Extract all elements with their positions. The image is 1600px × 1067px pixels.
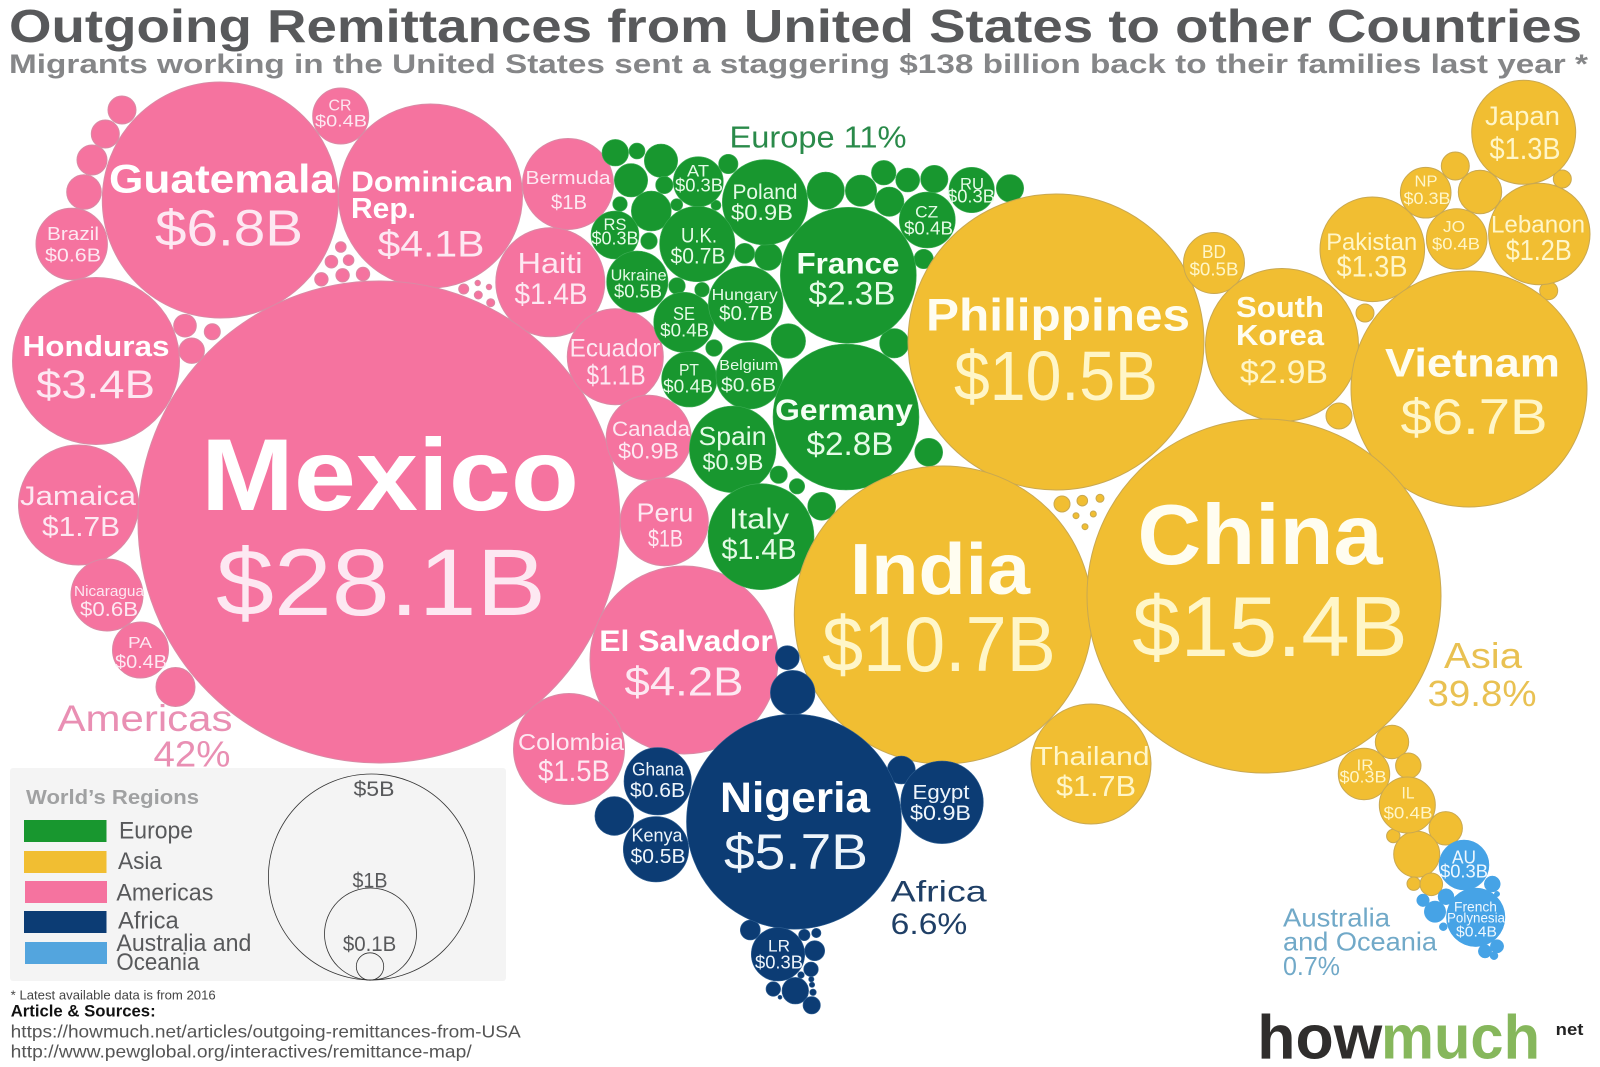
bubble: Kenya (623, 817, 689, 882)
source links: https://howmuch.net/articles/outgoing-remittances-from-USA (11, 1021, 521, 1041)
bubble: El Salvador: $4.2B (624, 658, 744, 704)
bubble: Ukraine (607, 251, 668, 312)
legend: Americas (25, 880, 213, 907)
region label: Australia and Oceania 0.7%: and Oceania (1283, 927, 1438, 957)
bubble: India: India (850, 530, 1031, 610)
bubble: Ukraine: Ukraine (611, 268, 667, 285)
bubble: Australia: AU (1452, 847, 1476, 867)
bubble: Australia: $0.3B (1440, 860, 1488, 881)
bubble: Ecuador: $1.1B (586, 359, 646, 390)
bubble: Russia (947, 167, 995, 213)
bubble: Portugal: PT (679, 361, 699, 380)
bubble: France: France (796, 247, 900, 280)
bubble: Serbia (591, 211, 639, 259)
panel: Europe bubbles (591, 120, 1024, 590)
bubble: U.K.: $0.7B (670, 243, 726, 268)
region label: Africa 6.6%: Africa (891, 876, 987, 909)
legend: Americas: Americas (116, 880, 213, 907)
bubble: French Polynesia: French (1454, 899, 1497, 915)
bubble: Hungary: Hungary (712, 287, 778, 304)
subtitle: Migrants working in the United States sent a staggering $138 billion back to their families last year * (9, 49, 1589, 79)
region label: Australia and Oceania 0.7%: Australia (1283, 903, 1391, 933)
bubble: Belgium (716, 342, 783, 409)
bubble: Ecuador (567, 309, 663, 405)
bubble: Mexico (138, 281, 620, 763)
bubble: Panama (112, 622, 168, 678)
bubble: El Salvador (590, 566, 778, 754)
bubble: Guatemala: $6.8B (155, 200, 303, 257)
panel: Africa bubbles (595, 646, 987, 1014)
bubble: Nepal: $0.3B (1404, 189, 1450, 208)
bubble: Egypt: $0.9B (910, 802, 971, 825)
bubble: Ukraine: $0.5B (614, 282, 662, 302)
bubble: Italy: Italy (729, 503, 790, 535)
sources heading: Article & Sources: (11, 1002, 156, 1021)
bubble: Italy: $1.4B (722, 534, 796, 566)
bubble: Jordan: JO (1443, 219, 1465, 236)
bubble: Nigeria (686, 714, 902, 929)
bubble: Nigeria: $5.7B (724, 824, 868, 880)
bubble: Portugal: $0.4B (663, 376, 713, 396)
bubble: Jordan: $0.4B (1432, 234, 1480, 253)
bubble: Guatemala: Guatemala (109, 158, 336, 202)
bubble: Spain: Spain (698, 421, 766, 451)
bubble: Ghana (624, 748, 691, 815)
bubble: Kenya: $0.5B (630, 846, 686, 868)
bubble: Iran: IR (1356, 758, 1374, 775)
bubble: French Polynesia: $0.4B (1456, 924, 1497, 941)
legend: Asia (24, 848, 163, 875)
region label: Americas 42% (58, 698, 232, 775)
source links: http://www.pewglobal.org/interactives/remittance-map/ (11, 1041, 472, 1061)
bubble: Jamaica (18, 445, 138, 565)
bubble: Canada: Canada (612, 418, 690, 441)
bubble: Philippines (908, 194, 1204, 490)
bubble: French Polynesia: Polynesia (1447, 910, 1505, 926)
bubble: Thailand: $1.7B (1056, 771, 1136, 803)
bubble: Russia: $0.3B (947, 187, 995, 207)
bubble: French Polynesia (1446, 888, 1505, 947)
legend: Europe: Europe (119, 818, 193, 845)
bubble: Poland (722, 160, 808, 245)
bubble: France: $2.3B (808, 275, 896, 311)
bubble: Liberia: LR (768, 937, 790, 956)
title: Outgoing Remittances from United States to other Countries (9, 0, 1582, 52)
bubble: Australia (1439, 840, 1489, 890)
bubble: Czech Republic: $0.4B (904, 219, 953, 239)
bubble: Nepal (1400, 167, 1451, 218)
bubble: Bangladesh: $0.5B (1190, 260, 1238, 280)
bubble: Thailand: Thailand (1034, 741, 1150, 771)
footnote: * Latest available data is from 2016 (11, 988, 216, 1002)
bubble: Colombia: Colombia (518, 729, 624, 755)
region label: Asia 39.8%: 39.8% (1428, 673, 1536, 714)
bubble: Pakistan: $1.3B (1336, 251, 1408, 284)
bubble: Panama: $0.4B (115, 652, 167, 672)
panel: Australia and Oceania bubbles (1283, 840, 1505, 981)
region label: Africa 6.6%: 6.6% (891, 908, 967, 941)
region label: Americas 42%: Americas (58, 698, 232, 739)
bubble: Canada: $0.9B (618, 438, 679, 463)
logo: howmuch.net: net (1556, 1020, 1584, 1039)
legend: Asia: Asia (118, 848, 163, 875)
bubble: Japan: Japan (1485, 101, 1560, 131)
bubble: Colombia (514, 694, 624, 804)
bubble: Lebanon: $1.2B (1506, 235, 1572, 267)
bubble: Haiti (496, 228, 605, 337)
bubble: Vietnam (1351, 271, 1587, 507)
bubble: Panama: PA (128, 635, 152, 652)
bubble: Jamaica: $1.7B (42, 511, 120, 542)
bubble: Canada (606, 395, 691, 480)
panel: Asia bubbles (794, 80, 1590, 896)
bubble: Peru: $1B (648, 526, 683, 553)
logo: howmuch.net (1257, 1003, 1584, 1067)
bubble: Japan (1472, 80, 1576, 184)
bubble: Germany: $2.8B (806, 426, 894, 462)
bubble: U.K. (660, 206, 735, 282)
bubble: Lebanon: Lebanon (1491, 212, 1585, 239)
region label: Americas 42%: 42% (154, 734, 230, 775)
bubble: South Korea (1206, 268, 1358, 422)
bubble: Dominican Republic: $4.1B (378, 224, 484, 265)
bubble: Peru (620, 478, 708, 566)
bubble: Bangladesh: BD (1202, 242, 1226, 262)
bubble: Jordan (1426, 209, 1487, 269)
bubble: China (1087, 419, 1441, 773)
bubble: Nicaragua (71, 559, 145, 631)
bubble: India (794, 466, 1092, 764)
legend heading: World’s Regions (26, 787, 199, 809)
bubble: Haiti: Haiti (518, 248, 582, 280)
legend: Australia and Oceania (25, 930, 251, 976)
bubble: U.K.: U.K. (681, 224, 717, 247)
bubble: Bermuda (522, 138, 614, 230)
bubble: Dominican Republic: Dominican (351, 167, 513, 199)
size scale circles: $5B (354, 778, 394, 801)
bubble: Liberia (751, 928, 805, 981)
bubble: Nepal: NP (1414, 174, 1438, 191)
legend: Africa (24, 908, 179, 935)
bubble: Costa Rica: CR (328, 98, 352, 115)
bubble: Haiti: $1.4B (514, 278, 588, 311)
bubble: Iran: $0.3B (1340, 767, 1386, 786)
size scale circles: $0.1B (343, 933, 396, 956)
bubble: Sweden: SE (673, 304, 695, 324)
bubble: Austria: AT (687, 162, 709, 181)
bubble: Sweden: $0.4B (660, 321, 709, 341)
bubble: Czech Republic: CZ (915, 202, 938, 221)
bubble: Israel (1379, 777, 1435, 833)
region label: Asia 39.8%: Asia (1444, 635, 1523, 676)
bubble: South Korea: South (1236, 292, 1324, 324)
bubble: South Korea: $2.9B (1240, 354, 1328, 390)
bubble: France (780, 207, 916, 343)
bubble: Colombia: $1.5B (538, 755, 610, 788)
size scale circles: $1B (352, 869, 388, 892)
bubble: Egypt: Egypt (912, 782, 970, 804)
bubble: Iran (1338, 748, 1390, 800)
bubble: Pakistan: Pakistan (1326, 229, 1417, 256)
bubble: Serbia: $0.3B (592, 228, 638, 248)
small unlabeled Europe bubbles (602, 139, 1024, 520)
legend: Australia and Oceania: Oceania (116, 949, 200, 976)
bubble: Lebanon (1489, 183, 1590, 285)
bubble: South Korea: Korea (1236, 320, 1325, 352)
legend: Australia and Oceania: Australia and (116, 930, 251, 957)
bubble: Brazil: Brazil (47, 224, 99, 244)
bubble: Italy (708, 484, 814, 590)
bubble: China: $15.4B (1132, 580, 1408, 675)
small unlabeled Oceania bubbles (1417, 876, 1504, 960)
bubble: Ghana: Ghana (632, 760, 685, 780)
region label: Asia 39.8% (1428, 635, 1536, 714)
bubble: Belgium: Belgium (719, 358, 778, 374)
bubble: El Salvador: El Salvador (599, 625, 773, 658)
bubble: Honduras: $3.4B (36, 363, 155, 407)
bubble: Honduras: Honduras (22, 331, 170, 363)
bubble: Japan: $1.3B (1490, 131, 1560, 166)
bubble: Thailand (1031, 704, 1151, 824)
bubble: Germany (773, 344, 919, 490)
bubble: Poland: Poland (732, 181, 798, 204)
bubble: Vietnam: $6.7B (1400, 389, 1548, 445)
bubble: Hungary: $0.7B (719, 303, 773, 325)
bubble: Liberia: $0.3B (755, 952, 803, 972)
bubble: Spain (689, 406, 776, 493)
region label: Australia and Oceania 0.7%: 0.7% (1283, 951, 1340, 981)
bubble: Belgium: $0.6B (721, 375, 776, 397)
bubble: Spain: $0.9B (702, 449, 764, 475)
panel: legend (10, 768, 506, 981)
bubble: Philippines: Philippines (926, 290, 1190, 341)
bubble: Bermuda: Bermuda (526, 168, 612, 188)
source links (11, 1021, 521, 1061)
bubble: Honduras (12, 278, 180, 444)
bubble: Brazil: $0.6B (45, 245, 101, 266)
bubble: Israel: $0.4B (1384, 803, 1432, 822)
bubble: Poland: $0.9B (731, 200, 793, 225)
small unlabeled Africa bubbles (595, 646, 915, 1014)
bubble: Kenya: Kenya (632, 826, 683, 846)
bubble: Czech Republic (899, 192, 955, 248)
bubble: Serbia: RS (604, 215, 626, 234)
bubble: Mexico: $28.1B (216, 530, 546, 636)
small unlabeled Americas bubbles (67, 96, 495, 706)
bubble: Bangladesh (1184, 232, 1244, 294)
bubble: Ecuador: Ecuador (570, 335, 660, 363)
bubble: Nicaragua: Nicaragua (74, 584, 145, 600)
bubble: Brazil (36, 208, 107, 280)
bubble: Egypt (901, 761, 983, 844)
bubble: Nigeria: Nigeria (720, 774, 871, 822)
bubble: India: $10.7B (822, 600, 1056, 688)
bubble: Germany: Germany (775, 394, 913, 427)
panel: Americas bubbles (12, 82, 778, 804)
bubble: Dominican Republic: Rep. (351, 193, 416, 225)
small unlabeled Asia bubbles (1054, 152, 1571, 896)
region label: Africa 6.6% (891, 876, 987, 941)
bubble: China: China (1138, 488, 1383, 583)
bubble: Peru: Peru (637, 498, 693, 528)
bubble: Costa Rica: $0.4B (315, 112, 367, 131)
bubble: Sweden (654, 292, 714, 352)
bubble: Pakistan (1320, 197, 1425, 302)
bubble: Vietnam: Vietnam (1385, 342, 1560, 386)
bubble: Nicaragua: $0.6B (80, 599, 138, 621)
bubble: Austria (673, 157, 723, 207)
region label: Australia and Oceania 0.7% (1283, 903, 1438, 981)
bubble: Portugal (662, 352, 717, 407)
bubble: Israel: IL (1402, 783, 1414, 802)
bubble: Costa Rica (313, 88, 369, 144)
bubble: Dominican Republic (338, 104, 522, 288)
bubble: Mexico: Mexico (201, 418, 579, 532)
bubble: Russia: RU (960, 174, 984, 193)
legend: Africa: Africa (118, 908, 179, 935)
bubble: Jamaica: Jamaica (20, 481, 137, 511)
bubble: Guatemala (102, 82, 338, 318)
bubble: Hungary (708, 266, 783, 341)
bubble: Austria: $0.3B (675, 176, 723, 196)
bubble: Philippines: $10.5B (954, 337, 1158, 415)
bubble: Bermuda: $1B (551, 192, 587, 214)
size scale circles (268, 774, 474, 980)
region label: Europe 11%: Europe 11% (730, 120, 906, 155)
legend: Europe (24, 818, 193, 845)
bubble: Ghana: $0.6B (630, 780, 685, 802)
